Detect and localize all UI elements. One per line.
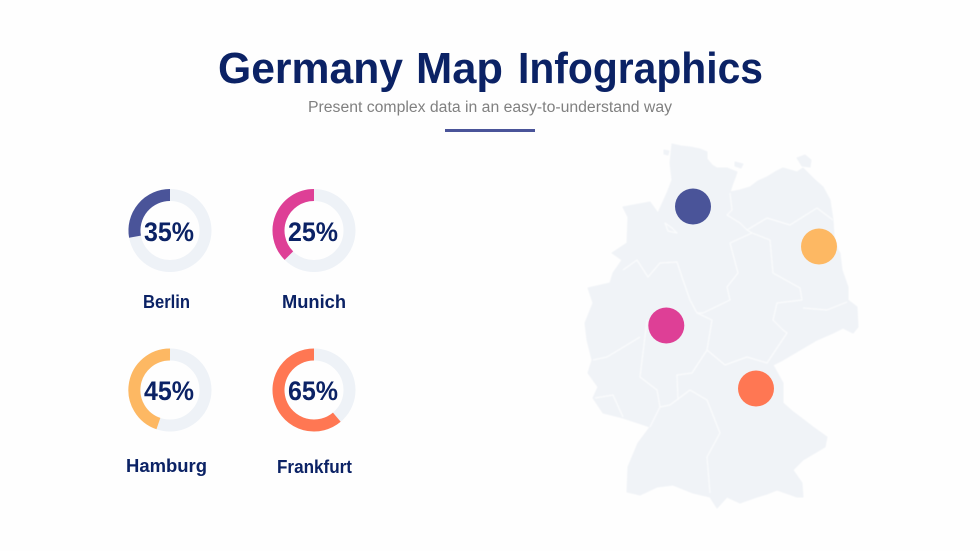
title: Infographics — [518, 44, 763, 93]
map of Germany — [585, 144, 858, 508]
donut value arc — [134, 195, 170, 237]
percentage: 45% — [144, 376, 194, 406]
title underline — [445, 129, 535, 132]
percentage: 65% — [288, 376, 338, 406]
donut value arc — [278, 354, 337, 426]
percentage: 35% — [144, 217, 194, 247]
donut track — [278, 195, 350, 266]
title — [218, 44, 763, 93]
panel: Berlin donut — [134, 195, 206, 312]
panel: Munich donut — [278, 195, 350, 312]
percentage: 25% — [288, 217, 338, 247]
title: Map — [416, 44, 503, 93]
city label: Berlin — [143, 292, 190, 312]
marker: coral dot — [738, 370, 774, 406]
city label: Munich — [282, 292, 346, 312]
donut value arc — [279, 195, 314, 256]
marker: orange dot — [801, 228, 837, 264]
subtitle: Present complex data in an easy-to-understand way — [308, 99, 672, 116]
marker: pink dot — [648, 308, 684, 344]
donut track — [278, 354, 350, 426]
donut track — [134, 354, 206, 426]
panel: Hamburg donut — [126, 354, 207, 476]
city label: Hamburg — [126, 456, 207, 476]
panel: Frankfurt donut — [277, 354, 352, 477]
state borders — [593, 193, 847, 493]
city label: Frankfurt — [277, 457, 352, 477]
donut track — [134, 195, 206, 266]
title: Germany — [218, 44, 404, 93]
marker: blue dot — [675, 188, 711, 224]
donut value arc — [134, 354, 170, 424]
country shape — [585, 144, 858, 508]
